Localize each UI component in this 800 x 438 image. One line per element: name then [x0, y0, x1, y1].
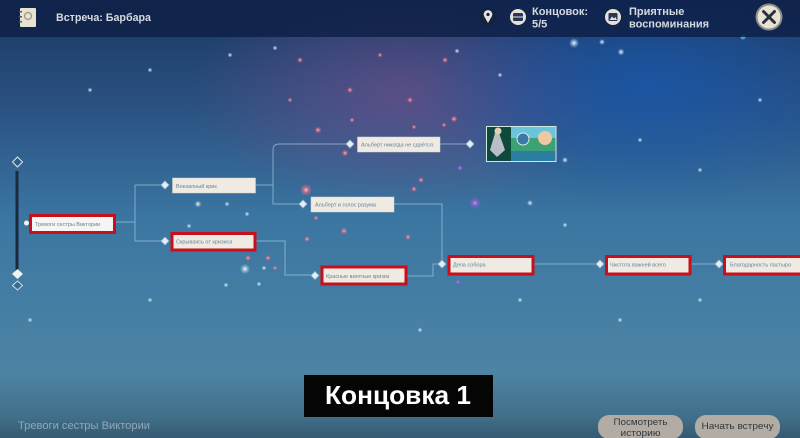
node: Чистота важней всего: Чистота важней всего	[610, 262, 666, 268]
button: start encounter: Начать встречу	[702, 421, 774, 432]
node: Дела собора: Дела собора	[453, 262, 487, 268]
node: Альберт и голос разума: Альберт и голос разума	[315, 202, 377, 208]
node: Тревоги сестры Виктории: Тревоги сестры Виктории	[35, 222, 100, 228]
pleasant memories label: воспоминания	[629, 18, 709, 30]
header bar	[0, 0, 800, 37]
icon: chest	[510, 9, 526, 25]
caption: Концовка 1	[304, 375, 493, 417]
node: Скрываясь от кризиса: Скрываясь от кризиса	[176, 240, 233, 246]
node: Внезапный крик	[172, 178, 256, 193]
icon: encounter book	[19, 8, 36, 27]
endings counter: Концовок:	[532, 6, 588, 18]
endings counter: 5/5	[532, 18, 547, 30]
node: Чистота важней всего	[606, 256, 690, 274]
connector diamonds	[161, 140, 723, 280]
node: Красная винтные кризиз: Красные винтные кризиз	[326, 274, 390, 280]
connector lines	[115, 144, 717, 276]
node: Тревоги сестры Виктории	[30, 216, 114, 232]
node: Скрываясь от кризиса	[172, 234, 255, 250]
button: view story: Посмотреть	[614, 417, 668, 428]
caption: Концовка 1: Концовка 1	[325, 380, 471, 410]
current story title: Тревоги сестры Виктории	[18, 420, 150, 432]
heading: encounter title: Встреча: Барбара	[56, 12, 152, 24]
node: Дела собора	[449, 256, 533, 274]
node: Альберт никогда не сдаётся	[358, 137, 440, 152]
node: Альберт никогда не сдаётся: Альберт никогда не сдаётся	[361, 142, 433, 148]
node: Благодарность пастыря: Благодарность пастыря	[730, 262, 791, 268]
node: Альберт и голос разума	[311, 197, 394, 212]
node: Благодарность пастыря	[724, 256, 800, 274]
node: Внезапный крик: Внезапный крик	[176, 183, 217, 190]
icon: picture	[605, 9, 621, 25]
icon: close button	[756, 4, 782, 30]
zoom slider	[12, 157, 29, 290]
ending thumbnail image	[486, 126, 556, 162]
icon: location	[479, 8, 497, 26]
node: Красная винтные кризиз	[322, 267, 406, 284]
pleasant memories label: Приятные	[629, 6, 684, 18]
button: start encounter	[695, 415, 780, 438]
button: view story	[598, 415, 683, 438]
